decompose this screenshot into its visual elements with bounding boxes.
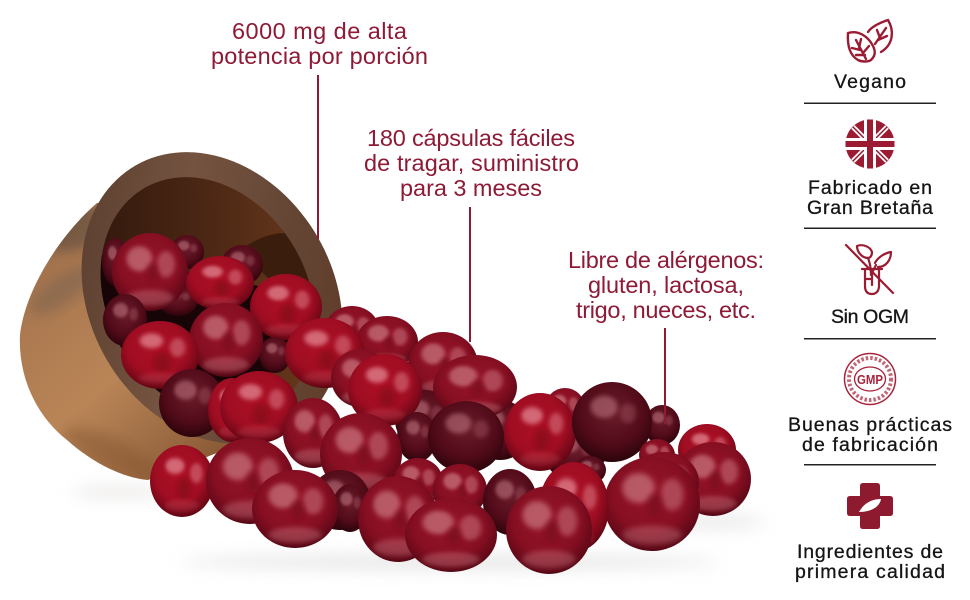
callout: libre de alergenos: Libre de alérgenos: <box>568 247 764 273</box>
icon: gmp stamp: GMP <box>857 372 883 387</box>
floor shadows <box>70 486 765 569</box>
icon: medical cross with leaf <box>847 483 893 529</box>
callout: libre de alergenos: gluten, lactosa, <box>588 272 744 298</box>
callout: libre de alergenos <box>568 247 764 424</box>
callout: 6000 mg: potencia por porción <box>211 43 428 69</box>
badge: fabricado en gran bretana <box>804 120 936 229</box>
bowl outer body <box>20 200 250 480</box>
badge: sin ogm: Sin OGM <box>831 306 909 328</box>
bowl interior <box>58 138 358 458</box>
callout: 180 capsulas: 180 cápsulas fáciles <box>367 125 575 151</box>
callout: 180 capsulas: para 3 meses <box>400 175 542 201</box>
badge: vegano: Vegano <box>834 71 906 93</box>
badge: buenas practicas: Buenas prácticas <box>788 414 952 436</box>
badge: buenas practicas <box>788 354 952 466</box>
badge: ingredientes: Ingredientes de <box>797 541 943 563</box>
wooden bowl <box>20 152 342 480</box>
badge: buenas practicas: de fabricación <box>802 434 938 456</box>
badge: fabricado en gran bretana: Gran Bretaña <box>807 197 933 219</box>
bowl rim <box>30 104 394 492</box>
icon: gmp stamp <box>844 354 896 404</box>
callout: 6000 mg: 6000 mg de alta <box>232 18 408 44</box>
badge: sin ogm <box>804 245 936 340</box>
callout: 180 capsulas: de tragar, suministro <box>364 150 579 176</box>
badge: ingredientes <box>795 483 945 583</box>
callout: 6000 mg <box>211 18 428 239</box>
icon: union flag circle <box>846 120 894 168</box>
badge: ingredientes: primera calidad <box>795 561 945 583</box>
callout: 180 capsulas <box>364 125 579 342</box>
icon: crossed plant in tube <box>846 245 893 294</box>
cherry pile <box>102 233 751 574</box>
icon: leaves <box>848 20 892 62</box>
badge: fabricado en gran bretana: Fabricado en <box>808 177 932 199</box>
callout: libre de alergenos: trigo, nueces, etc. <box>576 297 756 323</box>
badge: vegano <box>804 20 936 104</box>
